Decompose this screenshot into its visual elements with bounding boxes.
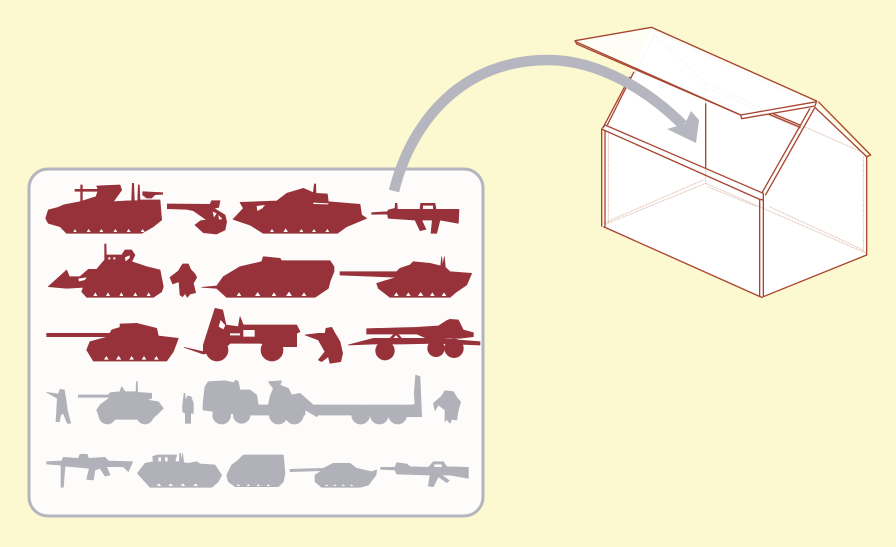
gray silhouettes (47, 375, 468, 487)
panel: equipment inventory (29, 169, 483, 516)
figure: crouching soldier (305, 327, 343, 363)
icon: carbine rifle (381, 462, 468, 487)
vehicle: gray tank (290, 463, 377, 487)
lid front edge (575, 41, 817, 115)
icon: assault rifle (372, 203, 459, 233)
vehicle: box-shaped carrier (227, 455, 285, 487)
vehicle: towed howitzer (348, 319, 480, 360)
figure: soldier pointing (47, 389, 71, 423)
vehicle: robotic arm turret (167, 201, 227, 234)
vehicle: dozer tank (48, 244, 163, 297)
vehicle: battle tank (233, 184, 367, 233)
vehicle: forklift loader (184, 308, 300, 361)
house walls and roof fill (603, 30, 867, 297)
vehicle: long-barrel tank (47, 323, 178, 361)
figure: standing soldier (183, 393, 193, 423)
figure: soldier in bomb suit, gray (433, 391, 461, 423)
diagram: open-roof house (575, 27, 871, 297)
vehicle: self-propelled gun (202, 257, 334, 297)
raised roof lid (575, 27, 817, 119)
vehicle: tracked carrier (137, 453, 222, 487)
red silhouettes (46, 183, 480, 363)
vehicle: armored car (78, 382, 163, 424)
vehicle: truck with flatbed trailer (203, 375, 422, 424)
icon: machine gun on tripod (47, 454, 133, 487)
front wall edges and posts (602, 128, 867, 297)
vehicle: infantry fighting vehicle (46, 183, 163, 233)
arrow: from panel to house (394, 60, 699, 191)
vehicle: main battle tank facing left (340, 257, 472, 297)
figure: soldier in bomb suit (170, 264, 197, 297)
roof frame (602, 72, 871, 200)
hidden dotted edges (603, 33, 867, 253)
